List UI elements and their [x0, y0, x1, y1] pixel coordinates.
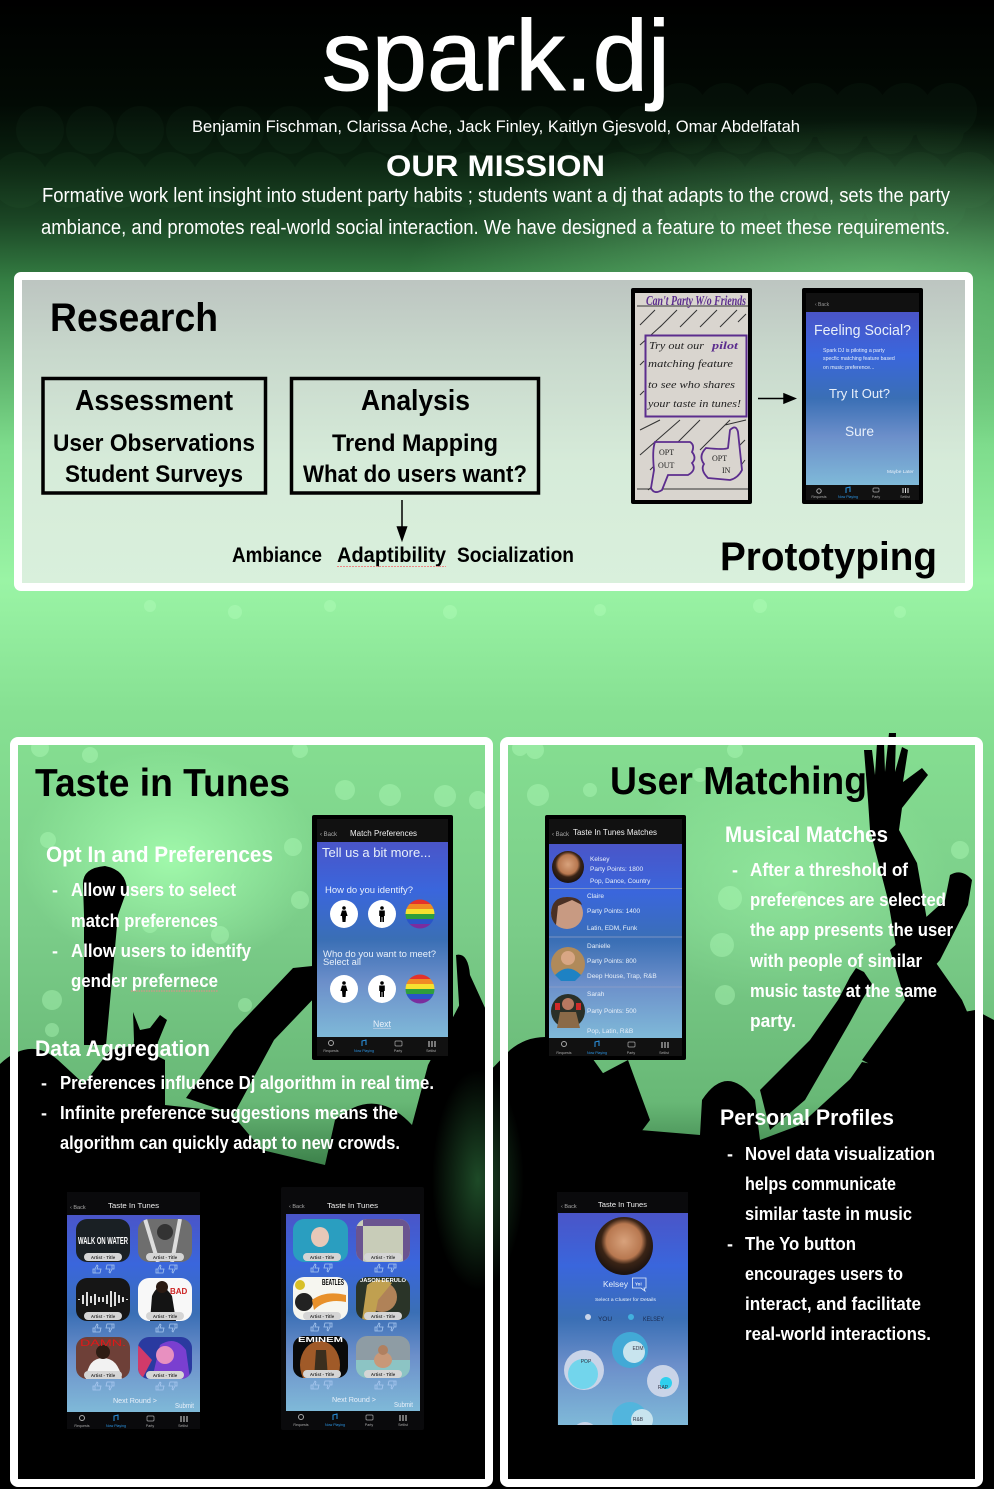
data aggregation text block: Infinite preference suggestions means the	[60, 1103, 398, 1123]
crowd silhouette	[0, 733, 994, 1489]
musical matches text block	[725, 822, 953, 1031]
phone: album round one: Setlist	[178, 1424, 188, 1428]
phone: matches list: Deep House, Trap, R&B	[587, 973, 657, 980]
opt in text block: Allow users to select	[71, 880, 236, 900]
phone: album round two: Artist - Title	[371, 1372, 396, 1377]
assessment box	[43, 378, 266, 493]
musical matches text block: After a threshold of	[750, 860, 909, 880]
phone: matches list: Latin, EDM, Funk	[587, 925, 638, 932]
phone: matches list: Setlist	[659, 1051, 669, 1055]
background spotlight left	[20, 750, 320, 970]
phone: album round two: Artist - Title	[371, 1314, 396, 1319]
paper sketch prototype: your taste in tunes!	[647, 398, 741, 410]
profile avatar	[595, 1217, 653, 1275]
phone: matches list: Requests	[556, 1051, 572, 1055]
musical matches text block: the app presents the user	[750, 920, 953, 940]
phone: matches list: Party Points: 1800	[590, 866, 643, 873]
paper sketch prototype: pilot	[711, 340, 739, 352]
mission heading: OUR MISSION	[386, 150, 605, 183]
phone: feeling social: Maybe Later	[887, 469, 914, 475]
phone: feeling social: Setlist	[900, 495, 910, 499]
phone: feeling social: Requests	[811, 495, 827, 499]
phone: match preferences: Tell us a bit more...	[322, 846, 431, 860]
phone: match preferences: Requests	[323, 1049, 339, 1053]
arrow to prototype	[758, 394, 795, 403]
phone: matches list: Now Playing	[587, 1051, 607, 1055]
yo button	[632, 1278, 646, 1291]
phone: album round two: Taste In Tunes	[327, 1201, 378, 1210]
yo button: Yo!	[635, 1282, 642, 1286]
musical matches text block: party.	[750, 1011, 796, 1031]
personal profiles text block: Personal Profiles	[720, 1105, 894, 1130]
data aggregation text block: algorithm can quickly adapt to new crowds.	[60, 1133, 400, 1153]
panel: taste in tunes	[14, 741, 489, 1483]
phone: album round two: BEATLES	[322, 1278, 344, 1287]
legend: KELSEY	[643, 1317, 664, 1323]
phone: feeling social: ‹ Back	[815, 302, 830, 308]
phone: album round two	[281, 1187, 424, 1430]
phone: matches list: Pop, Dance, Country	[590, 878, 651, 885]
phone: kelsey profile: Taste In Tunes	[598, 1200, 647, 1209]
phone: match preferences: Now Playing	[354, 1049, 374, 1053]
paper sketch prototype	[631, 288, 752, 504]
opt in text block: match preferences	[71, 911, 218, 931]
phone: match preferences: Who do you want to meet?	[323, 949, 436, 959]
assessment box: User Observations	[53, 430, 255, 457]
crowd raised fist	[83, 866, 127, 1045]
data aggregation text block: -	[41, 1073, 47, 1093]
phone: matches list: ‹ Back	[552, 832, 570, 838]
phone: album round one: Artist - Title	[153, 1373, 178, 1378]
crowd arm rising in right panel	[590, 1060, 650, 1160]
musical matches text block: -	[732, 860, 738, 880]
phone: match preferences: Match Preferences	[350, 829, 417, 838]
research outcomes: Socialization	[457, 544, 574, 567]
authors: Benjamin Fischman, Clarissa Ache, Jack Finley, Kaitlyn Gjesvold, Omar Abdelfatah	[192, 117, 800, 136]
analysis box	[292, 378, 538, 493]
phone: matches list: Party Points: 800	[587, 958, 637, 965]
phone: matches list: Party	[627, 1051, 635, 1055]
analysis box: Trend Mapping	[332, 430, 498, 457]
crowd tall hand	[862, 733, 975, 1090]
phone: album round one: BAD	[170, 1287, 188, 1296]
phone: album round two: Requests	[293, 1423, 309, 1427]
arrow down	[398, 500, 406, 540]
paper sketch prototype: matching feature	[648, 358, 733, 370]
phone: matches list: Kelsey	[590, 856, 610, 863]
research heading: Research	[50, 296, 218, 340]
phone: album round two: ‹ Back	[289, 1204, 305, 1210]
data aggregation text block	[35, 1036, 434, 1153]
phone: kelsey profile: ‹ Back	[561, 1204, 577, 1210]
phone: album round two: Submit	[394, 1402, 413, 1409]
opt in text block: gender prefernece	[71, 971, 218, 991]
data aggregation text block: Preferences influence Dj algorithm in real time.	[60, 1073, 434, 1093]
heading: user matching: User Matching	[610, 760, 867, 803]
crowd rock hand	[132, 1012, 167, 1080]
musical matches text block: preferences are selected	[750, 890, 946, 910]
phone: album round two: Now Playing	[325, 1423, 345, 1427]
personal profiles text block: encourages users to	[745, 1264, 903, 1284]
crowd body mass	[0, 1000, 994, 1489]
personal profiles text block: -	[727, 1234, 733, 1254]
phone: matches list: Pop, Latin, R&B	[587, 1028, 633, 1035]
phone: match preferences: Select all	[323, 957, 361, 967]
phone: feeling social: Feeling Social?	[814, 323, 911, 339]
crowd mid hand	[760, 968, 872, 1130]
musical matches text block: music taste at the same	[750, 981, 937, 1001]
paper sketch prototype: IN	[722, 466, 731, 475]
mission text	[41, 185, 950, 239]
phone: album round one: Taste In Tunes	[108, 1201, 159, 1210]
phone: album round two: Artist - Title	[371, 1255, 396, 1260]
phone: matches list: Sarah	[587, 991, 605, 998]
phone: match preferences: Party	[394, 1049, 402, 1053]
phone: match preferences	[312, 815, 453, 1060]
heading: taste in tunes: Taste in Tunes	[35, 762, 290, 805]
paper sketch prototype: to see who shares	[648, 379, 735, 391]
assessment box: Assessment	[75, 385, 233, 417]
personal profiles text block: The Yo button	[745, 1234, 856, 1254]
phone: feeling social: on music preference...	[823, 365, 874, 371]
panel: research and prototyping	[18, 276, 969, 587]
analysis box: Analysis	[361, 385, 470, 417]
phone: album round one: Party	[146, 1424, 154, 1428]
personal profiles text block: Novel data visualization	[745, 1144, 935, 1164]
phone: album round two: Artist - Title	[310, 1314, 335, 1319]
assessment box: Student Surveys	[65, 461, 243, 488]
phone: album round one: Now Playing	[106, 1424, 126, 1428]
phone: matches list	[545, 815, 686, 1060]
phone: album round one: Artist - Title	[153, 1314, 178, 1319]
phone: album round one: Submit	[175, 1403, 194, 1410]
phone: album round one: DAMN.	[80, 1338, 126, 1348]
phone: feeling social: specfic matching feature based	[823, 356, 895, 362]
paper sketch prototype: OUT	[658, 461, 675, 470]
crowd right arm in left panel	[440, 955, 490, 1100]
personal profiles text block: real-world interactions.	[745, 1324, 931, 1344]
phone: matches list: Party Points: 1400	[587, 908, 640, 915]
personal profiles text block: similar taste in music	[745, 1204, 912, 1224]
phone: kelsey profile: Select a Cluster for Details	[595, 1297, 657, 1303]
data aggregation text block: Data Aggregation	[35, 1036, 210, 1061]
phone: feeling social: Now Playing	[838, 495, 858, 499]
cluster bubbles	[564, 1332, 679, 1425]
phone: album round two: Setlist	[398, 1423, 408, 1427]
phone: feeling social: Sure	[845, 423, 874, 439]
paper sketch prototype: Try out our	[649, 340, 705, 352]
phone: matches list: Taste In Tunes Matches	[573, 828, 657, 837]
phone: album round two: Artist - Title	[310, 1372, 335, 1377]
phone: match preferences: Next	[373, 1019, 391, 1029]
paper sketch prototype: Can't Party W/o Friends	[646, 294, 746, 309]
musical matches text block: Musical Matches	[725, 822, 888, 847]
phone: album round two: JASON DERULO	[360, 1278, 406, 1284]
phone: album round two: EMINEM	[298, 1337, 343, 1344]
phone: matches list: Party Points: 500	[587, 1008, 637, 1015]
phone: feeling social: Spark DJ is piloting a party	[823, 348, 885, 354]
personal profiles text block	[720, 1105, 935, 1344]
phone: album round one	[67, 1192, 200, 1429]
phone: album round two: Next Round >	[332, 1395, 377, 1404]
phone: album round one: Next Round >	[113, 1396, 158, 1405]
personal profiles text block: -	[727, 1144, 733, 1164]
phone: matches list: Danielle	[587, 943, 611, 950]
personal profiles text block: helps communicate	[745, 1174, 896, 1194]
phone: album round one: Artist - Title	[91, 1314, 116, 1319]
phone: match preferences: ‹ Back	[320, 832, 338, 838]
phone: matches list: Claire	[587, 893, 604, 900]
opt in text block: Allow users to identify	[71, 941, 251, 961]
panel: user matching	[504, 741, 979, 1483]
opt in text block: -	[52, 880, 58, 900]
phone: match preferences: Setlist	[426, 1049, 436, 1053]
cluster bubbles: RAP	[658, 1385, 669, 1391]
research outcomes	[232, 544, 574, 567]
legend: YOU	[598, 1317, 612, 1323]
analysis box: What do users want?	[303, 461, 527, 488]
opt in text block: Opt In and Preferences	[46, 842, 273, 867]
phone: kelsey profile: Kelsey	[603, 1279, 629, 1289]
prototyping heading: Prototyping	[720, 535, 937, 579]
phone: album round one: Artist - Title	[153, 1255, 178, 1260]
phone: album round one: WALK ON WATER	[78, 1236, 128, 1247]
data aggregation text block: -	[41, 1103, 47, 1123]
research outcomes: Ambiance	[232, 544, 322, 567]
phone: feeling social: Try It Out?	[829, 386, 890, 401]
paper sketch prototype: OPT	[712, 454, 727, 463]
paper sketch prototype: OPT	[659, 448, 674, 457]
phone: album round two: Party	[365, 1423, 373, 1427]
research outcomes: Adaptibility	[337, 544, 446, 567]
legend	[585, 1314, 664, 1323]
cluster bubbles: POP	[581, 1359, 592, 1365]
logo: spark.dj	[322, 0, 670, 112]
crowd side arm	[890, 872, 972, 1000]
crowd lower hand	[800, 1062, 884, 1150]
phone: album round one: Requests	[74, 1424, 90, 1428]
crowd big diagonal arm	[186, 965, 322, 1114]
phone: album round two: Artist - Title	[310, 1255, 335, 1260]
background glow upper right	[400, 120, 994, 460]
phone: album round one: Artist - Title	[91, 1373, 116, 1378]
musical matches text block: with people of similar	[749, 951, 922, 971]
opt in text block	[46, 842, 273, 991]
background scalloped lights	[0, 83, 994, 1037]
cluster bubbles: R&B	[633, 1417, 644, 1423]
cluster bubbles: EDM	[632, 1346, 644, 1352]
background spotlight right	[610, 760, 950, 1000]
phone: feeling social	[802, 288, 923, 504]
phone: kelsey profile	[557, 1192, 688, 1448]
personal profiles text block: interact, and facilitate	[745, 1294, 921, 1314]
phone: match preferences: How do you identify?	[325, 885, 413, 895]
phone: album round one: Artist - Title	[91, 1255, 116, 1260]
phone: album round one: ‹ Back	[70, 1205, 86, 1211]
phone: feeling social: Party	[872, 495, 880, 499]
opt in text block: -	[52, 941, 58, 961]
dark green corner glow	[432, 1070, 524, 1290]
